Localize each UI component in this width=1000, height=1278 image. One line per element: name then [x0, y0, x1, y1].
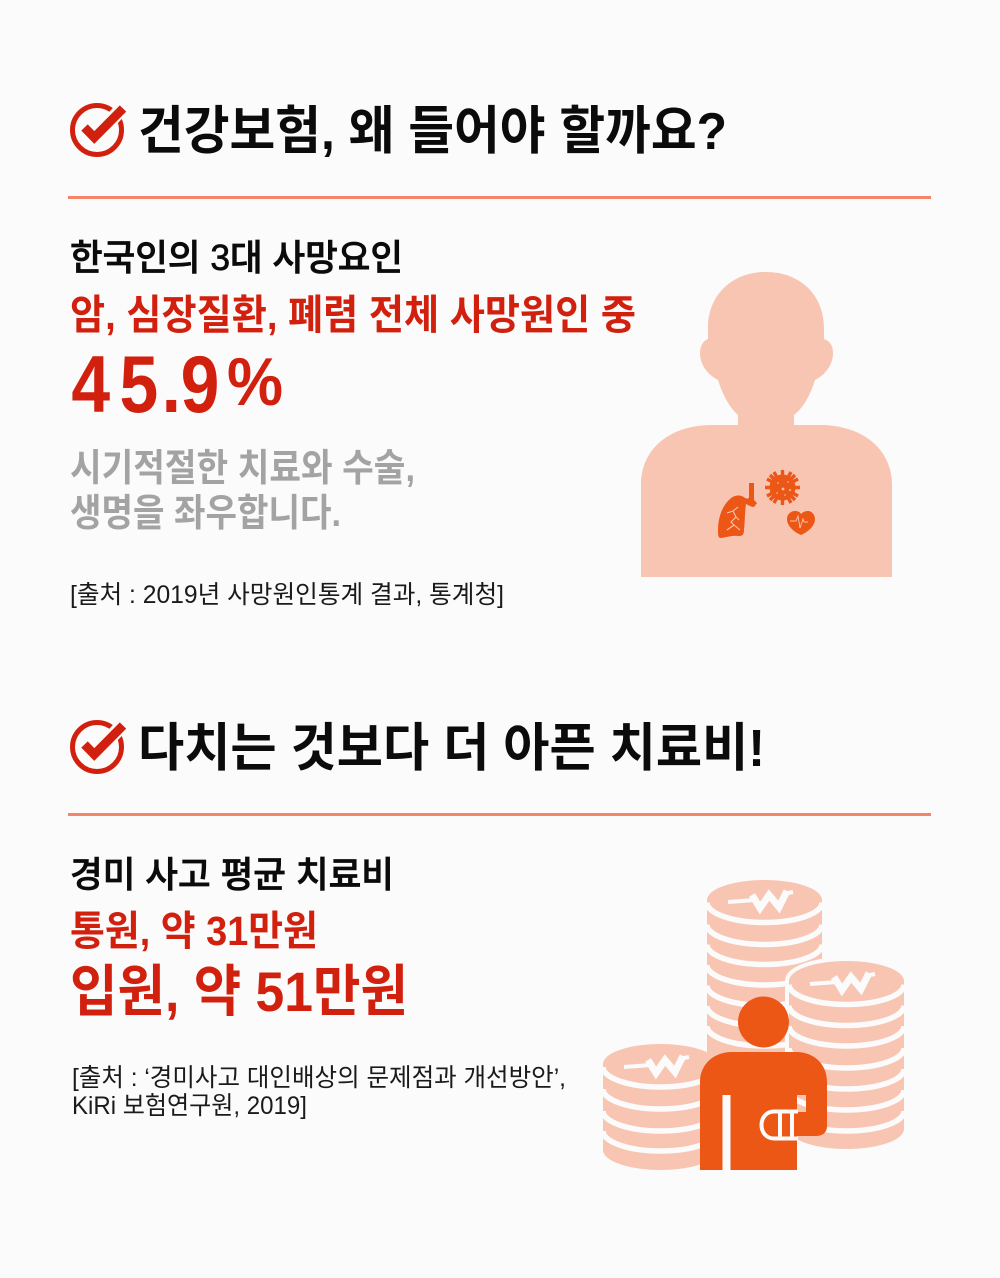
- coin stack: right: [789, 961, 904, 1149]
- icon: red check circle: [72, 722, 123, 772]
- source note: [출처 : 2019년 사망원인통계 결과, 통계청]: [70, 581, 504, 609]
- big number: 45.9%: [71, 340, 283, 430]
- big number: 45.9%: 45.9: [71, 340, 219, 430]
- coin stack: middle: [707, 880, 822, 1060]
- grey statement: 생명을 좌우합니다.: [70, 493, 341, 535]
- subheading: minor accident average cost: 경미 사고 평균 치료비: [70, 854, 394, 895]
- rule: [68, 196, 931, 199]
- source note: KiRi 보험연구원, 2019]: [72, 1092, 307, 1120]
- heading: section one title: 건강보험, 왜 들어야 할까요?: [138, 103, 727, 161]
- icon: virus: [765, 470, 800, 505]
- icon: red check circle: [72, 106, 123, 154]
- section: why health insurance: [68, 103, 931, 609]
- source note: [출처 : ‘경미사고 대인배상의 문제점과 개선방안’,: [72, 1064, 566, 1092]
- section: treatment costs: [68, 720, 931, 1170]
- arm cast: [762, 1112, 798, 1138]
- source note: [72, 1064, 566, 1120]
- inpatient cost: 입원, 약 51만원: [70, 960, 408, 1023]
- rule: [68, 813, 931, 816]
- icon: lung: [718, 483, 757, 538]
- big number: 45.9%: %: [227, 344, 283, 420]
- grey statement: 시기적절한 치료와 수술,: [70, 448, 415, 490]
- grey statement: [70, 448, 415, 535]
- illustration: coin stacks and injured person: [603, 880, 904, 1170]
- outpatient cost: 통원, 약 31만원: [70, 908, 318, 954]
- heading: section two title: 다치는 것보다 더 아픈 치료비!: [138, 720, 765, 778]
- illustration: human silhouette with organs: [641, 272, 892, 577]
- icon: heart: [787, 511, 815, 535]
- person with arm cast: [700, 996, 827, 1170]
- red statement: 암, 심장질환, 폐렴 전체 사망원인 중: [70, 292, 636, 338]
- subheading: top three causes of death: 한국인의 3대 사망요인: [70, 237, 403, 278]
- coin stack: left: [603, 1044, 718, 1170]
